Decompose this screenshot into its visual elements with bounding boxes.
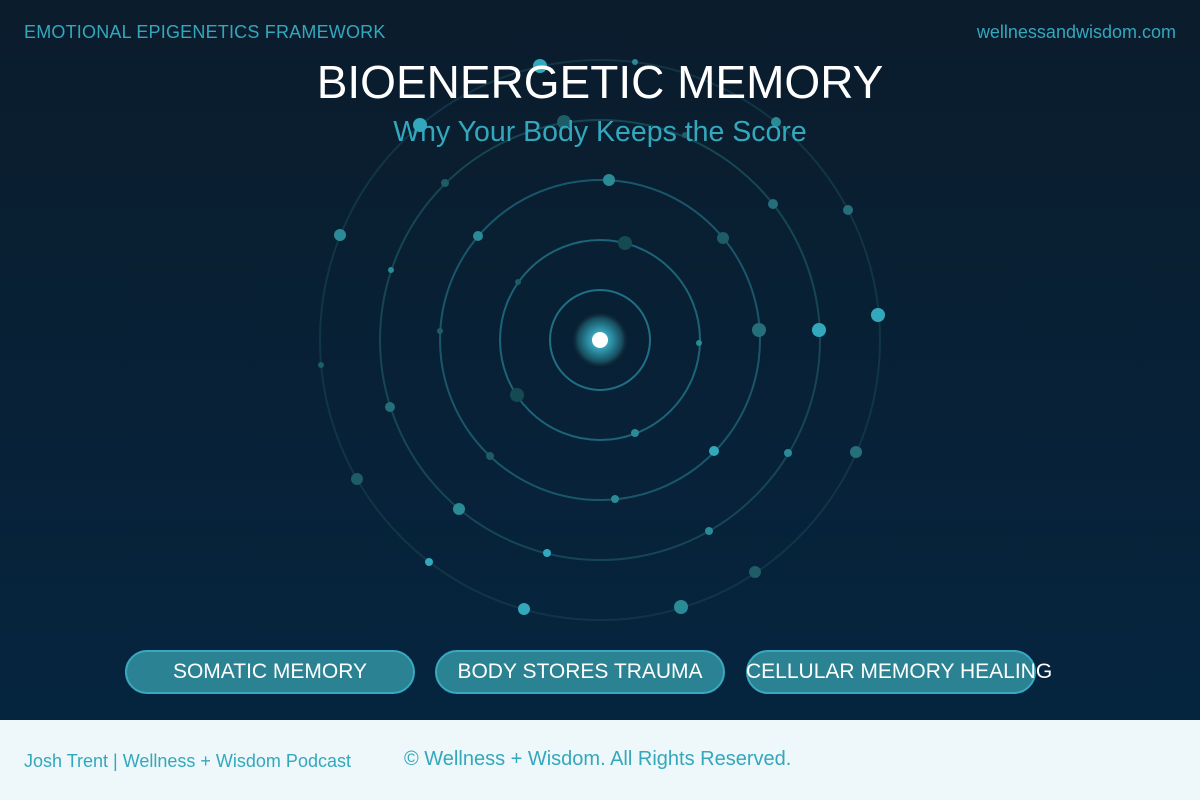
pill: cellular memory healing [746, 650, 1036, 694]
pill label 2: BODY STORES TRAUMA [457, 660, 703, 683]
website: wellnessandwisdom.com [977, 22, 1176, 42]
subtitle: Why Your Body Keeps the Score [393, 116, 807, 148]
footer credit: Josh Trent | Wellness + Wisdom Podcast [24, 751, 351, 771]
pill: somatic memory [125, 650, 415, 694]
header label: EMOTIONAL EPIGENETICS FRAMEWORK [24, 22, 386, 42]
pill label 3: CELLULAR MEMORY HEALING [746, 660, 1052, 683]
pill: body stores trauma [435, 650, 725, 694]
pill label 1: SOMATIC MEMORY [173, 660, 367, 683]
footer [0, 720, 1200, 800]
copyright: © Wellness + Wisdom. All Rights Reserved. [404, 748, 791, 770]
title: BIOENERGETIC MEMORY [317, 56, 883, 108]
